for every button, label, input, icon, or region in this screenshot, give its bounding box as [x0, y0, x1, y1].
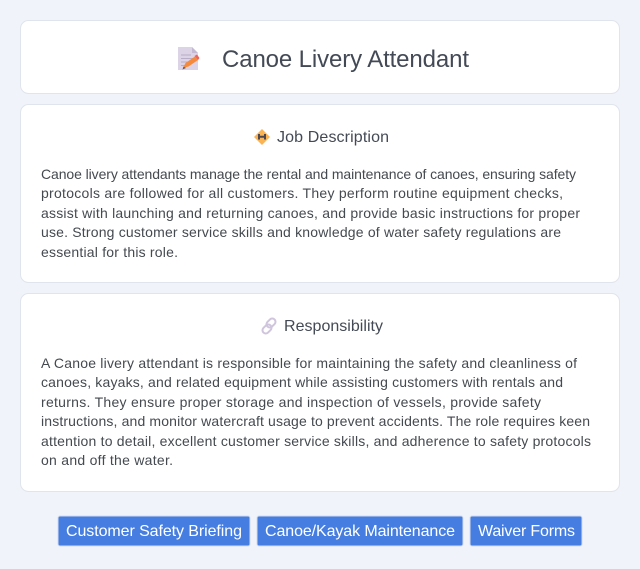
heading: responsibility: Responsibility: [284, 318, 383, 335]
icon: chain link: [261, 317, 277, 335]
responsibility text: [41, 355, 591, 468]
responsibility text: canoes, kayaks, and related equipment while assisting customers with rentals and: [41, 374, 563, 390]
tag: canoe/kayak maintenance: [257, 516, 463, 546]
tag: waiver forms: [470, 516, 582, 546]
responsibility text: instructions, and monitor watercraft usage to prevent accidents. The role requires keen: [41, 413, 590, 429]
tag: customer safety briefing: Customer Safety Briefing: [66, 523, 242, 540]
panel: job description: [20, 104, 620, 282]
responsibility text: returns. They ensure proper storage and inspection of vessels, provide safety: [41, 394, 541, 410]
panel: responsibility: [20, 294, 620, 492]
icon: diamond road sign: [254, 129, 270, 145]
panel: title: [20, 20, 620, 94]
icon: document with pencil: [178, 47, 200, 70]
heading: job description: Job Description: [277, 129, 389, 146]
responsibility text: on and off the water.: [41, 452, 173, 468]
responsibility text: attention to detail, excellent customer service skills, and adherence to safety protocols: [41, 433, 591, 449]
job description text: assist with launching and returning canoes, and provide basic instructions for proper: [41, 205, 580, 221]
job description text: [41, 166, 580, 260]
tag: customer safety briefing: [58, 516, 250, 546]
job description text: Canoe livery attendants manage the rental and maintenance of canoes, ensuring safety: [41, 166, 576, 182]
job description text: essential for this role.: [41, 244, 178, 260]
job description text: use. Strong customer service skills and knowledge of water safety regulations are: [41, 224, 561, 240]
tag: canoe/kayak maintenance: Canoe/Kayak Maintenance: [265, 523, 455, 540]
tag: waiver forms: Waiver Forms: [478, 523, 575, 540]
job description text: protocols are followed for all customers. They perform routine equipment checks,: [41, 185, 563, 201]
responsibility text: A Canoe livery attendant is responsible for maintaining the safety and cleanliness of: [41, 355, 577, 371]
title text: Canoe Livery Attendant: [222, 46, 469, 73]
